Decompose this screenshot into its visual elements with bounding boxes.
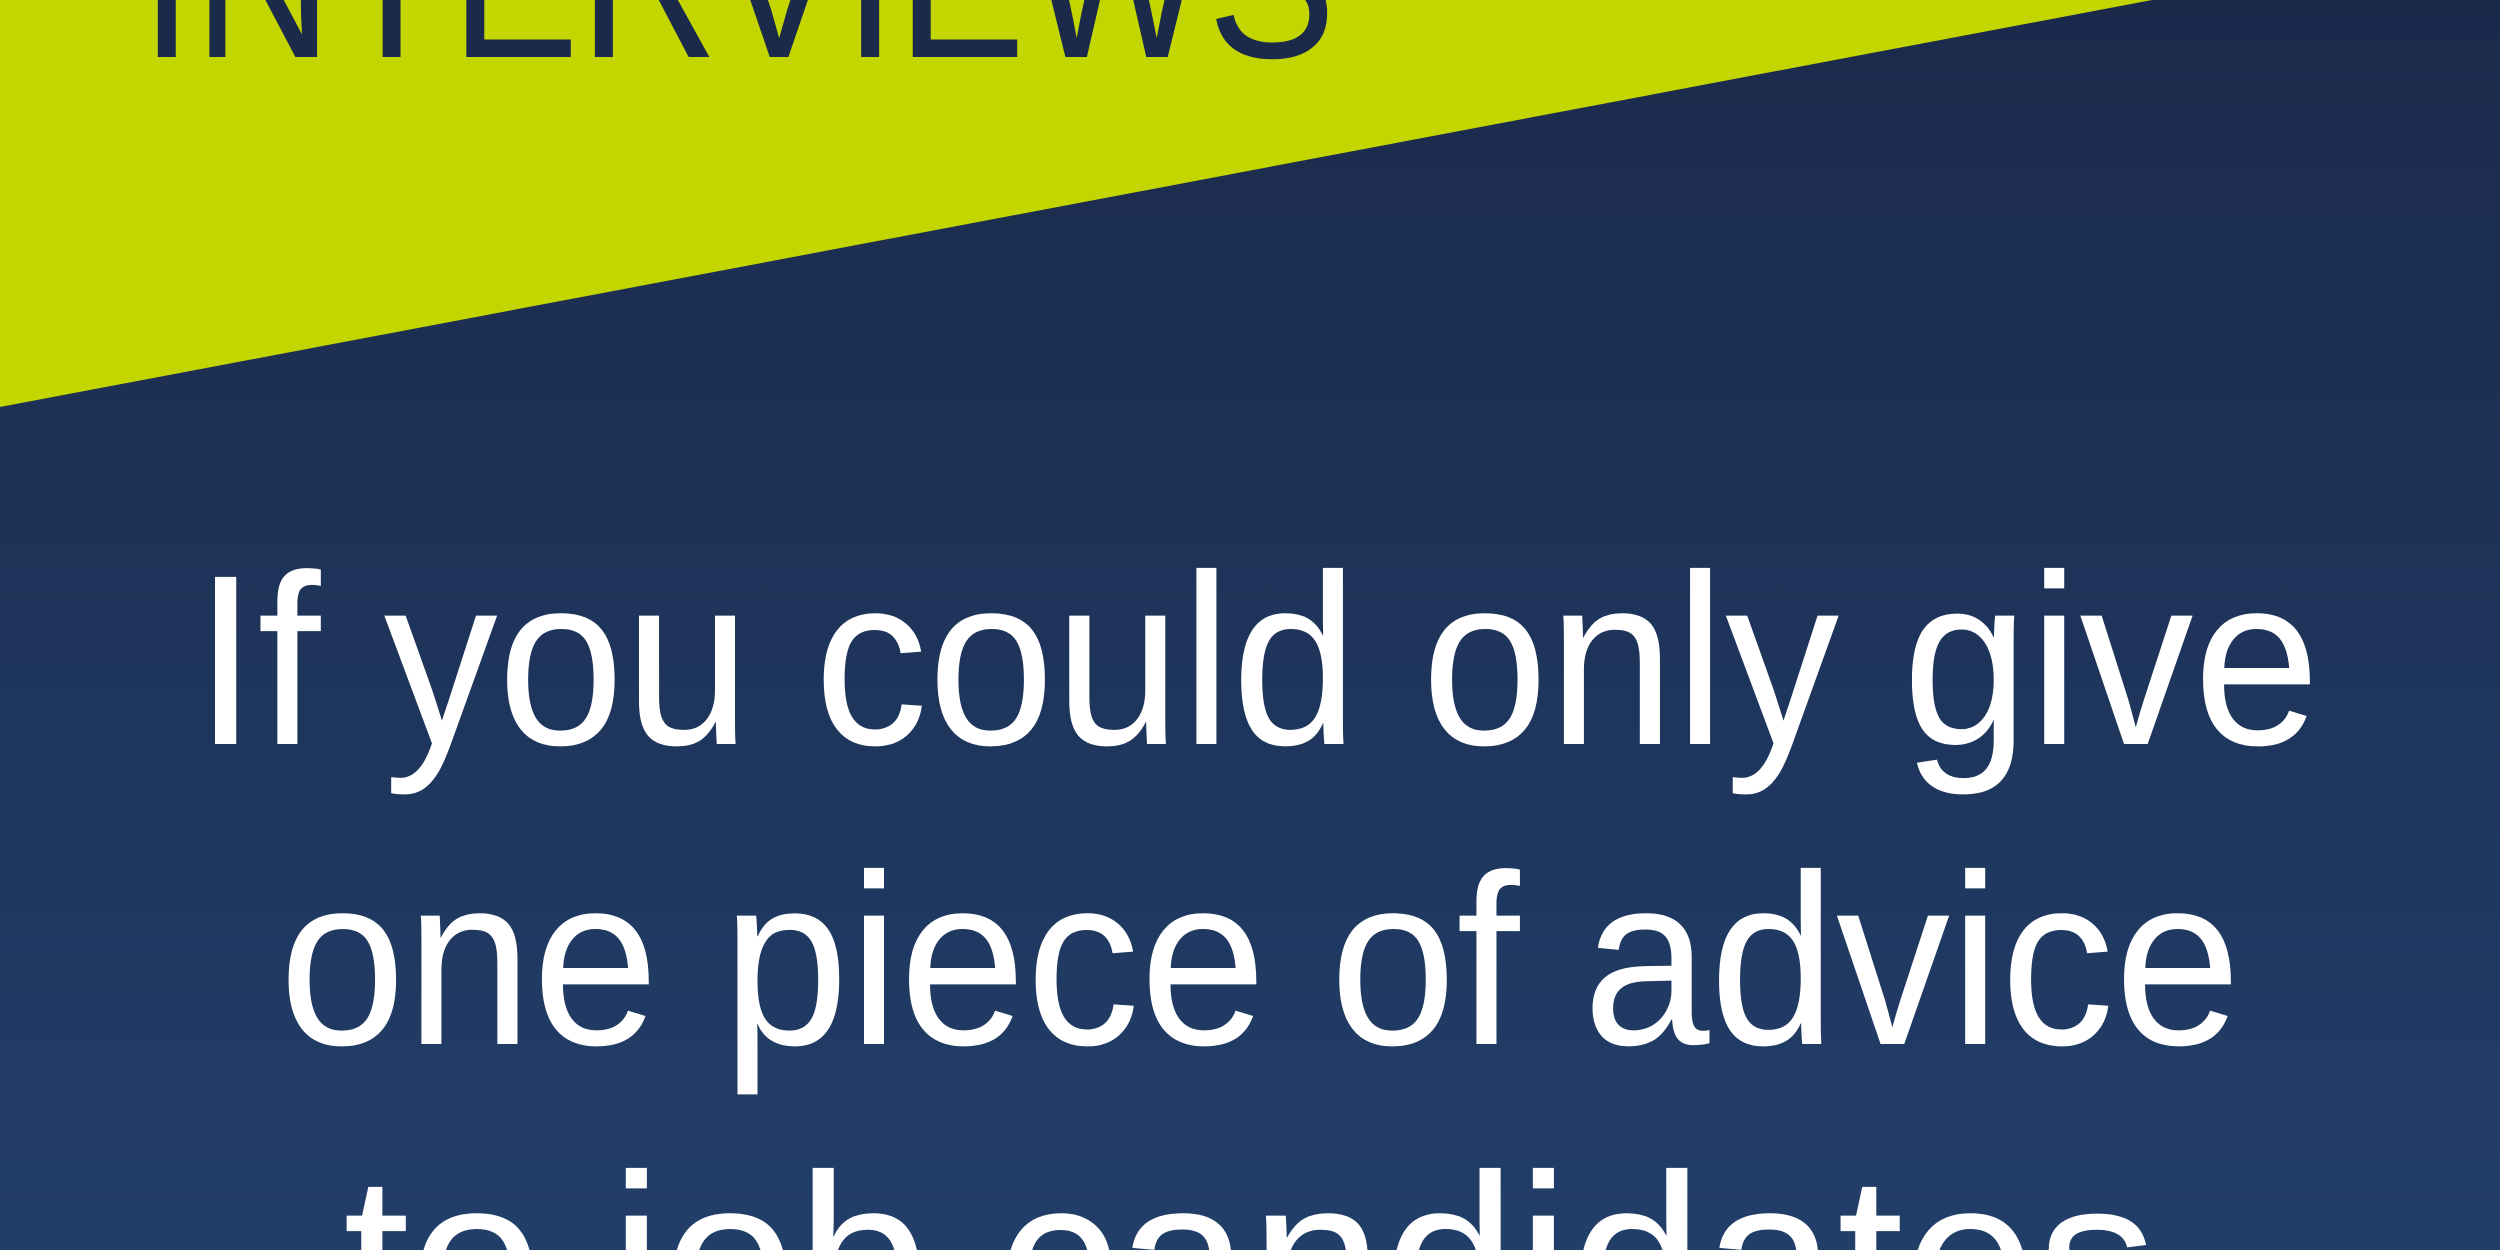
question text: If you could only give <box>194 525 2320 796</box>
question text: one piece of advice <box>279 825 2241 1096</box>
question text <box>194 525 2320 1255</box>
lime banner <box>0 0 2152 407</box>
